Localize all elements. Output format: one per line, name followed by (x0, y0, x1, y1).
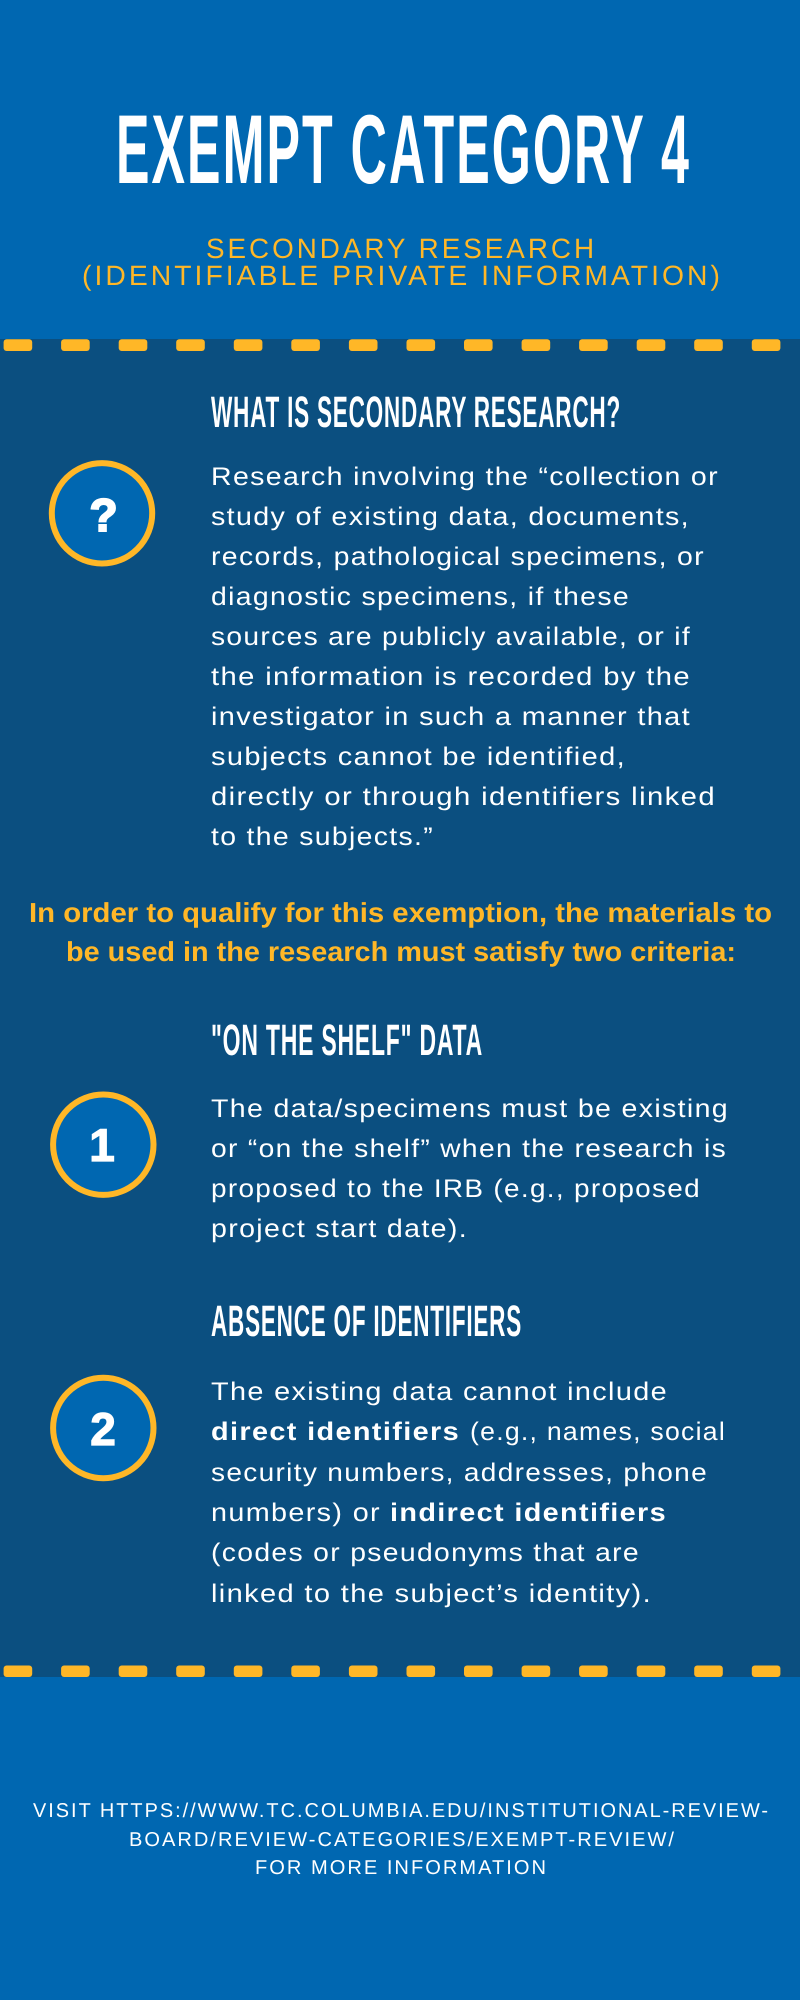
footer text: VISIT HTTPS://WWW.TC.COLUMBIA.EDU/INSTITUTIONAL-REVIEW- (33, 1800, 770, 1822)
text block: criterion 2: direct identifiers (211, 1418, 460, 1446)
text block: definition: diagnostic specimens, if these (211, 583, 630, 611)
text block: criterion 1 (211, 1095, 729, 1243)
subtitle: SECONDARY RESEARCH (206, 233, 597, 264)
dashed divider: top (4, 339, 780, 351)
subtitle: (IDENTIFIABLE PRIVATE INFORMATION) (82, 260, 723, 291)
panel: header (0, 0, 800, 339)
text block: criterion 1: The data/specimens must be existing (211, 1095, 729, 1123)
section: what is secondary research (52, 388, 719, 851)
callout: two criteria: be used in the research must satisfy two criteria: (66, 936, 736, 967)
callout: two criteria: In order to qualify for this exemption, the materials to (29, 897, 772, 928)
text block: definition: sources are publicly available, or if (211, 623, 691, 651)
text block: criterion 2: security numbers, addresses, phone (211, 1459, 708, 1487)
text block: definition: directly or through identifiers linked (211, 783, 716, 811)
text block: criterion 2: (codes or pseudonyms that are (211, 1539, 640, 1567)
subtitle (82, 233, 723, 291)
icon: number 1 badge (53, 1094, 153, 1195)
footer text: FOR MORE INFORMATION (255, 1857, 548, 1879)
callout: two criteria (29, 897, 772, 967)
icon: question mark badge: ? (89, 489, 118, 541)
footer text (33, 1800, 770, 1879)
text block: definition (211, 463, 719, 851)
text block: definition: the information is recorded by the (211, 663, 691, 691)
icon: question mark badge (52, 463, 152, 564)
text block: criterion 2: (e.g., names, social (470, 1418, 726, 1446)
icon: number 1 badge: 1 (89, 1119, 115, 1171)
text block: criterion 1: or “on the shelf” when the research is (211, 1135, 727, 1163)
heading: on the shelf data: "ON THE SHELF" DATA (211, 1016, 483, 1065)
panel: main content (0, 339, 800, 1677)
text block: definition: records, pathological specimens, or (211, 543, 705, 571)
text block: criterion 2: indirect identifiers (390, 1499, 667, 1527)
text block: definition: to the subjects.” (211, 823, 434, 851)
text block: criterion 1: proposed to the IRB (e.g., proposed (211, 1175, 701, 1203)
text block: criterion 1: project start date). (211, 1215, 468, 1243)
text block: definition: Research involving the “collection or (211, 463, 719, 491)
footer text: BOARD/REVIEW-CATEGORIES/EXEMPT-REVIEW/ (129, 1829, 676, 1851)
text block: criterion 2: numbers) or (211, 1499, 381, 1527)
text block: criterion 2: The existing data cannot include (211, 1378, 668, 1406)
section: absence of identifiers (53, 1297, 726, 1608)
text block: definition: subjects cannot be identified, (211, 743, 626, 771)
text block: criterion 2 (211, 1378, 726, 1608)
dashed divider: bottom (4, 1666, 780, 1677)
text block: definition: investigator in such a manner that (211, 703, 691, 731)
section: on the shelf data (53, 1016, 729, 1243)
text block: criterion 2: linked to the subject’s identity). (211, 1580, 652, 1608)
panel: footer (0, 1677, 800, 2000)
icon: number 2 badge (53, 1378, 153, 1478)
text block: definition: study of existing data, documents, (211, 503, 690, 531)
icon: number 2 badge: 2 (90, 1403, 116, 1455)
